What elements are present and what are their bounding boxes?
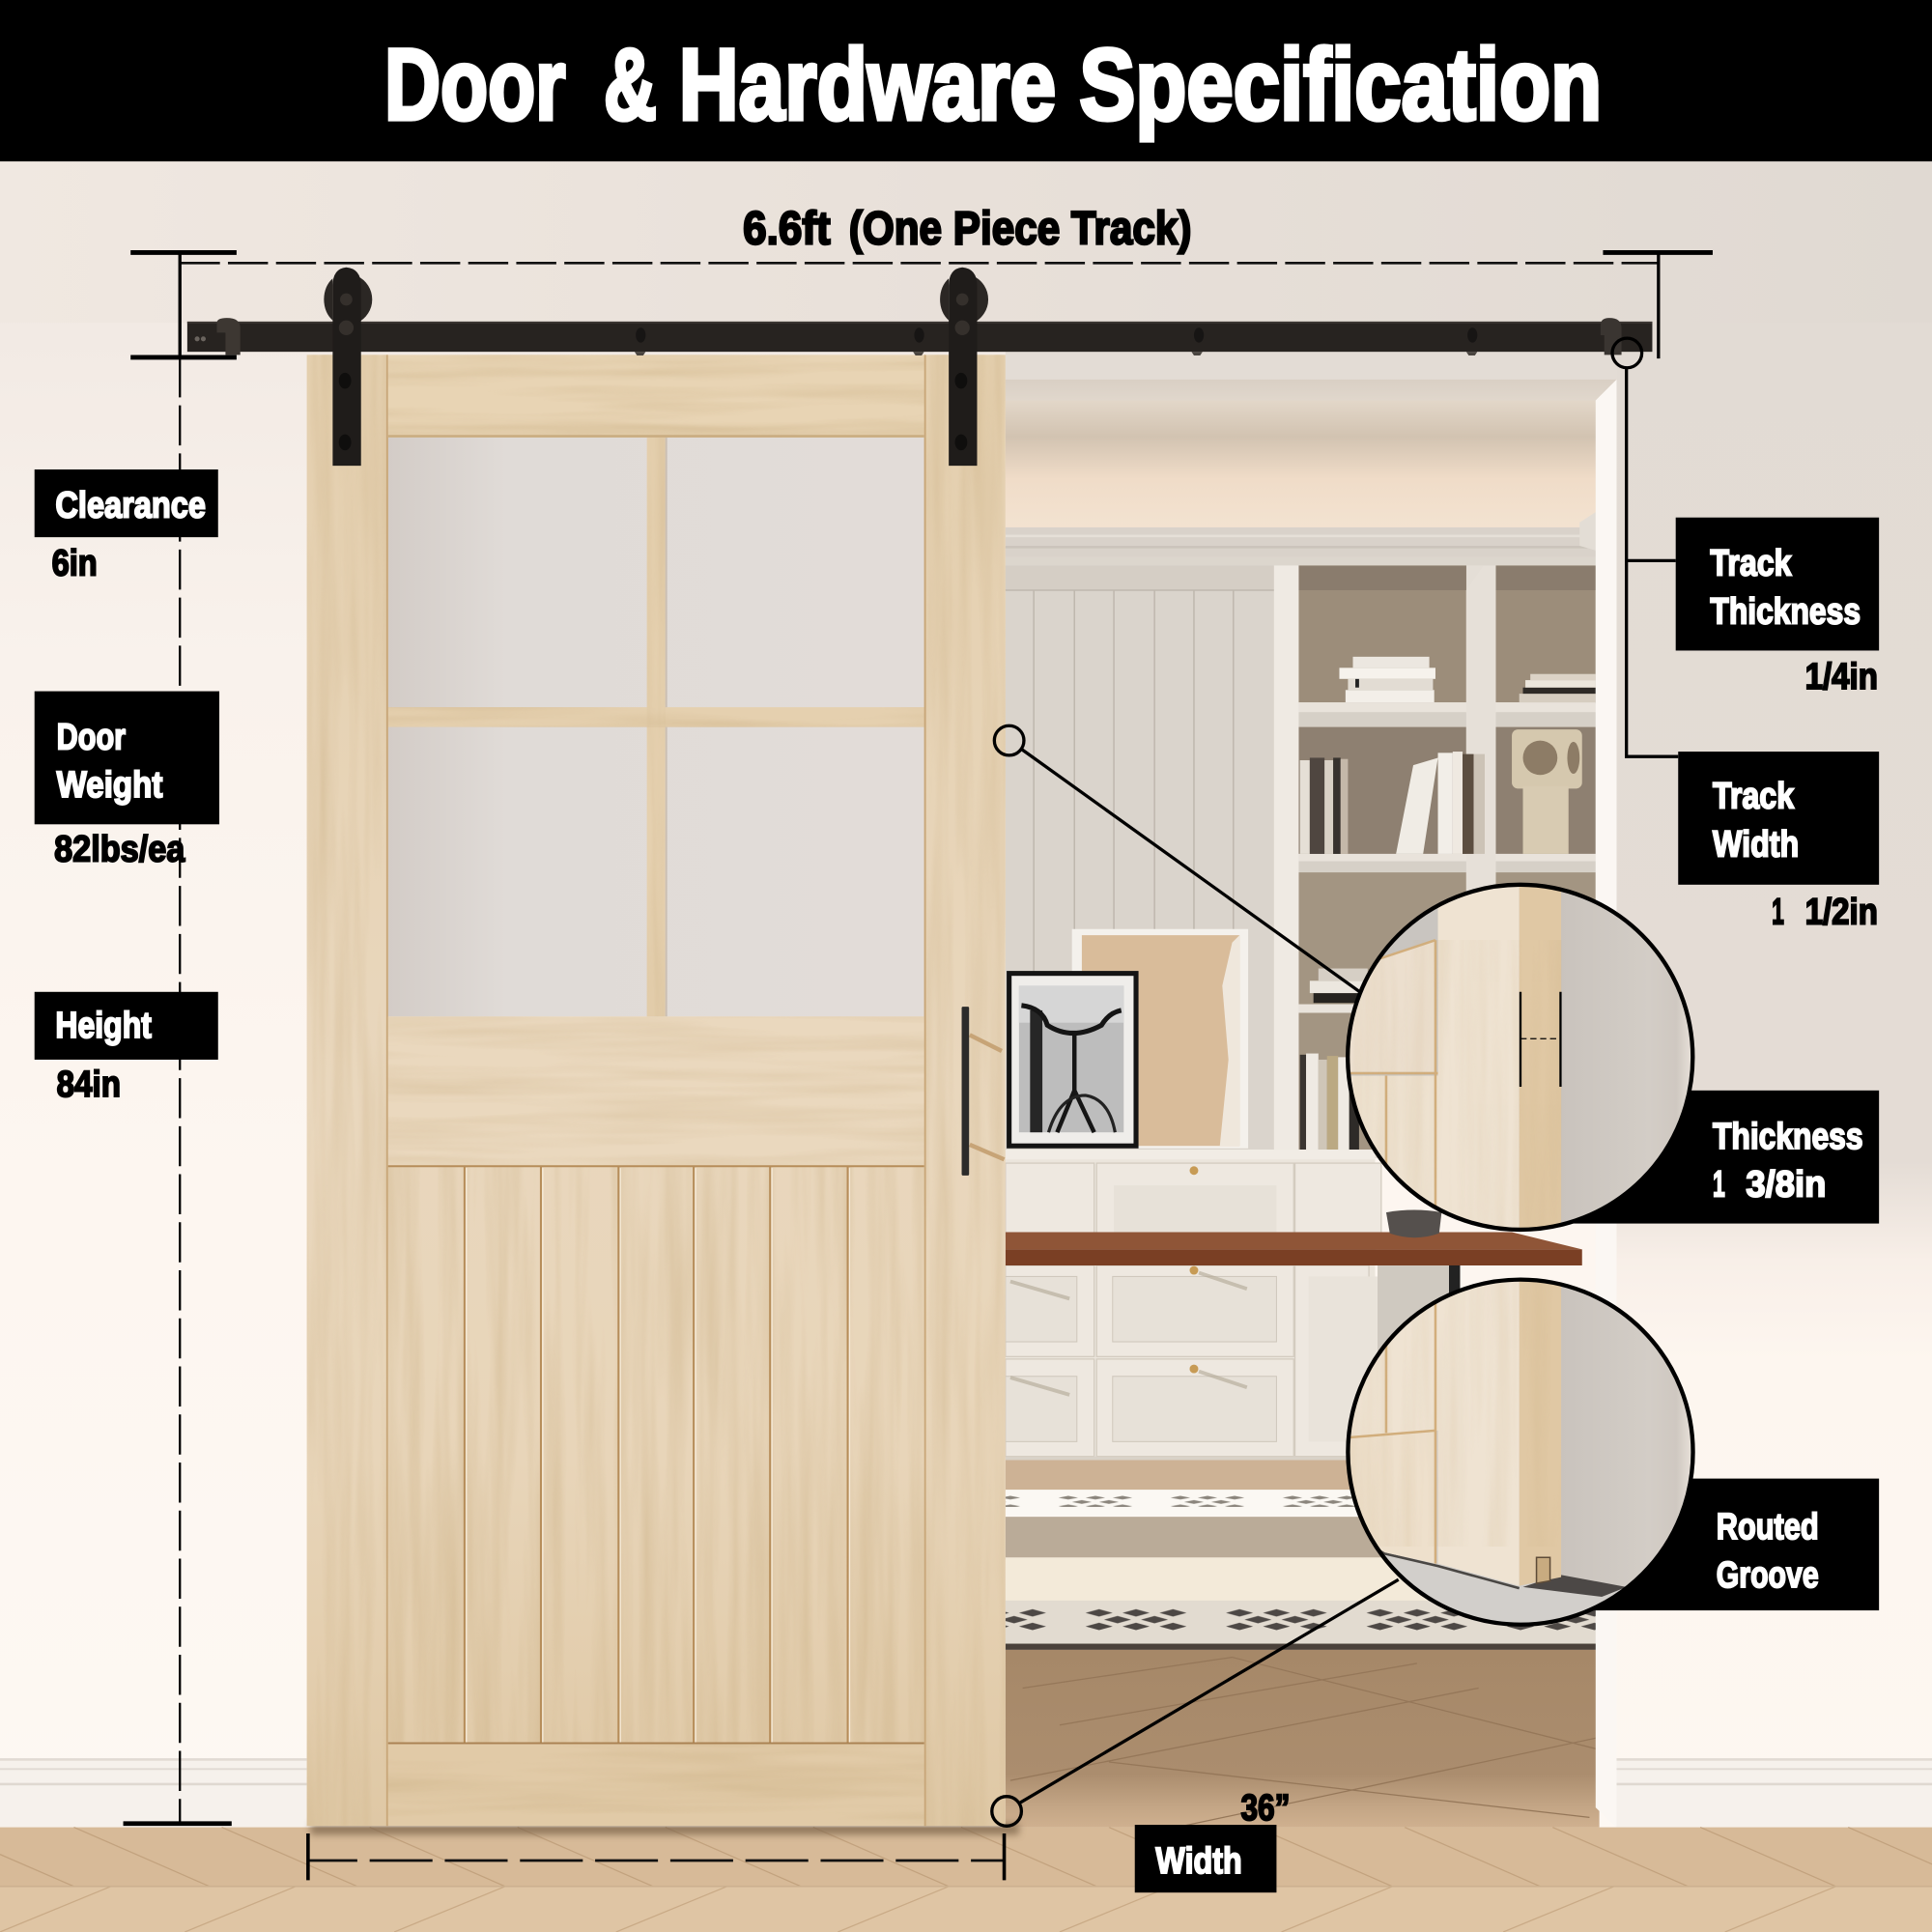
leaning art print: [1072, 929, 1248, 1149]
label: track thickness: 1/4in: [1805, 656, 1878, 697]
header band: [0, 0, 1932, 161]
label: height: 84in: [57, 1064, 121, 1105]
barn door: [307, 355, 1006, 1826]
label: width: Width: [1155, 1840, 1242, 1882]
label: door weight: [35, 692, 219, 870]
label: track width: [1678, 752, 1879, 933]
door height dimension line: [124, 357, 232, 1824]
label: clearance: [35, 469, 218, 584]
leader: door edge to thickness detail: [994, 725, 1361, 993]
label: thickness: 1: [1713, 1164, 1725, 1206]
books: upper shelf: [1339, 657, 1596, 702]
label: door weight: Door: [57, 717, 126, 758]
label: track width: 1/2in: [1805, 892, 1878, 933]
seven vertical planks: [388, 1166, 924, 1744]
barn door track: [187, 322, 1652, 355]
label: track thickness: [1676, 518, 1879, 697]
label: thickness: 3/8in: [1746, 1164, 1826, 1206]
glass panes: [388, 438, 924, 1016]
label: width: 36”: [1240, 1787, 1290, 1829]
door handle: [962, 1007, 1005, 1176]
label: clearance: 6in: [52, 543, 98, 584]
label: track width: Width: [1713, 823, 1799, 865]
left track stop: [216, 318, 241, 355]
label: routed groove: Routed: [1717, 1506, 1819, 1548]
label: thickness: Thickness: [1713, 1116, 1863, 1157]
bicycle photo: [1007, 971, 1139, 1149]
top rail: [388, 355, 924, 438]
door width dimension line: [308, 1833, 1005, 1880]
books: lower shelves: [1300, 969, 1369, 1151]
glass mullions: [388, 438, 924, 1016]
track length label: 6.6ft: [743, 203, 831, 255]
title: &: [604, 29, 657, 142]
label: height: [35, 992, 218, 1105]
ceiling: [1006, 397, 1600, 529]
left hanger strap: [324, 268, 372, 466]
track callout leader: [1612, 338, 1678, 756]
right track stop: [1601, 318, 1622, 355]
label: width: [1135, 1787, 1290, 1892]
table with bowl: [1006, 1210, 1582, 1296]
books: middle shelf: [1300, 752, 1485, 854]
label: clearance: Clearance: [55, 485, 206, 526]
label: routed groove: Groove: [1717, 1554, 1819, 1596]
door opening soffit and jamb: [1006, 380, 1616, 1828]
right stile: [924, 355, 1006, 1826]
low cabinets: [1006, 1150, 1454, 1460]
label: thickness: [1565, 1091, 1879, 1224]
label: track width: Track: [1713, 776, 1795, 817]
label: height: Height: [55, 1005, 152, 1046]
shadow under door: [310, 1824, 1019, 1834]
baseboards: [0, 1758, 1932, 1828]
label: track thickness: Track: [1710, 543, 1792, 584]
room seen through the doorway: [1006, 380, 1616, 1828]
label: routed groove: [1565, 1479, 1879, 1610]
label: door weight: 82lbs/ea: [54, 829, 185, 870]
foreground floor: [0, 1828, 1932, 1932]
label: door weight: Weight: [57, 764, 163, 806]
title: Door: [384, 29, 565, 142]
bookcase: [1274, 565, 1600, 1158]
leader: door bottom to groove detail: [992, 1579, 1399, 1826]
left stile: [307, 355, 388, 1826]
crown moulding: [1006, 511, 1600, 565]
detail circle: routed groove: [1343, 1275, 1700, 1633]
right hanger strap: [940, 268, 988, 466]
interior floor, rug and lower boards: [1006, 1460, 1600, 1828]
beadboard wall: [1006, 565, 1279, 1161]
bottom rail: [388, 1743, 924, 1826]
title: Specification: [1079, 29, 1602, 142]
label: track width: 1: [1772, 892, 1784, 933]
detail circle: door thickness: [1343, 881, 1700, 1238]
track length label: (One Piece Track): [849, 203, 1191, 255]
sculpture: [1512, 729, 1582, 854]
track length dimension: [130, 203, 1713, 358]
title: Hardware: [679, 29, 1056, 142]
label: track thickness: Thickness: [1710, 590, 1861, 632]
middle rail: [388, 1016, 924, 1166]
